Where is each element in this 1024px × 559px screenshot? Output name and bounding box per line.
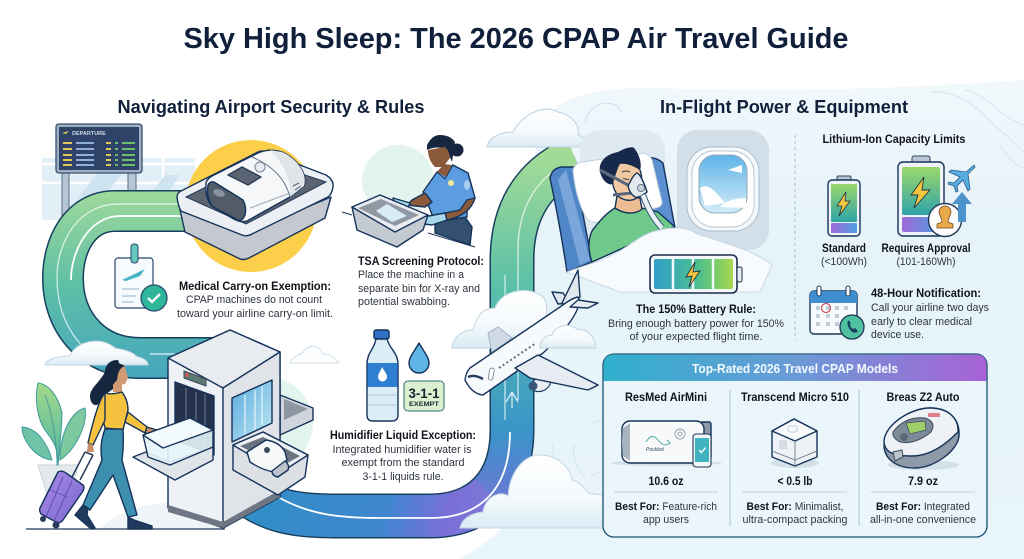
model: Transcend Micro 510 (741, 392, 849, 526)
model: Transcend Micro 510: ultra-compact packing (742, 514, 848, 526)
text: humidifier liquid exception: Integrated humidifier water is (332, 444, 472, 456)
cloud: behind airplane (452, 290, 547, 348)
icon: clear bin on scanner shelf (133, 418, 213, 480)
text: medical carry-on exemption: CPAP machines do not count (186, 294, 322, 306)
model: ResMed AirMini (610, 392, 722, 526)
icon: plant (22, 383, 85, 497)
text: 150% battery rule: Bring enough battery power for 150% (608, 318, 784, 330)
cloud: small centre (290, 346, 339, 363)
text: 48-hour notification (871, 288, 989, 341)
divider (794, 135, 796, 340)
illustration: TSA officer with bin (342, 135, 475, 247)
icon: airplane with up arrow (948, 165, 975, 222)
panel header (604, 355, 986, 381)
label: requires approval: Requires Approval (882, 243, 970, 255)
illustration: airplane (465, 270, 598, 395)
text: 48-hour notification: Call your airline two days (871, 302, 989, 314)
icon: departure board (56, 124, 142, 222)
text: TSA screening protocol: potential swabbing. (358, 296, 450, 308)
heading: airport security: Navigating Airport Security & Rules (118, 96, 424, 117)
illustration: sleeping passenger with window (550, 103, 772, 292)
text: humidifier liquid exception (330, 430, 476, 483)
icon: water drop (409, 343, 429, 373)
text: 150% battery rule: The 150% Battery Rule: (636, 304, 756, 316)
text: 150% battery rule (608, 304, 784, 343)
illustration: woman walking (75, 360, 160, 529)
badge: 3-1-1 exempt: 3-1-1 (408, 386, 440, 401)
text: medical carry-on exemption: Medical Carry-on Exemption: (179, 281, 331, 293)
model: ResMed AirMini: Pockled (646, 447, 664, 453)
label: standard battery: (<100Wh) (821, 256, 867, 268)
icon: water bottle (367, 330, 398, 421)
background: pale sky region (460, 80, 1024, 559)
panel title: Top-Rated 2026 Travel CPAP Models (692, 361, 898, 376)
model: Breas Z2 Auto: Breas Z2 Auto (886, 392, 960, 404)
model: Transcend Micro 510: Best For: Minimalist, (746, 501, 844, 513)
text: lithium-ion capacity limits: Lithium-Ion Capacity Limits (822, 134, 966, 146)
text: 150% battery rule: of your expected flight time. (630, 331, 762, 343)
model: Transcend Micro 510: Transcend Micro 510 (741, 392, 849, 404)
model: Breas Z2 Auto (870, 392, 976, 526)
cloud: in front of airplane (540, 325, 596, 348)
illustration: security X-ray scanner (168, 330, 313, 528)
label: standard battery (821, 243, 867, 268)
cloud: top of right section (487, 109, 590, 147)
model: ResMed AirMini: ResMed AirMini (625, 392, 707, 404)
text: 48-hour notification: device use. (871, 329, 924, 341)
cloud: left (45, 341, 148, 365)
model: ResMed AirMini: app users (643, 514, 689, 526)
badge: 3-1-1 exempt: EXEMPT (409, 401, 439, 408)
ribbon: green to blue conveyor path, left (57, 204, 215, 368)
icon: 150% battery (650, 255, 742, 293)
label: requires approval: (101-160Wh) (896, 256, 956, 268)
label: requires approval (882, 243, 970, 268)
icon: calendar with phone (810, 286, 864, 339)
model: Breas Z2 Auto: Best For: Integrated (876, 501, 970, 513)
heading: in-flight power: In-Flight Power & Equipment (660, 96, 908, 117)
text: medical carry-on exemption: toward your airline carry-on limit. (177, 308, 333, 320)
model: Breas Z2 Auto: all-in-one convenience (870, 514, 976, 526)
text: TSA screening protocol: TSA Screening Protocol: (358, 256, 484, 268)
text: humidifier liquid exception: Humidifier Liquid Exception: (330, 430, 476, 442)
badge: 3-1-1 exempt (404, 381, 444, 411)
illustration: pale circle behind scanner and floor (26, 377, 313, 529)
icon: large battery with approval stamp (898, 156, 962, 236)
icon: departure board: DEPARTURE (72, 131, 106, 137)
text: TSA screening protocol: Place the machine in a (358, 269, 465, 281)
label: standard battery: Standard (822, 243, 866, 255)
icon: bin with CPAP machine leaving scanner (233, 432, 308, 495)
text: humidifier liquid exception: exempt from the standard (342, 457, 464, 469)
text: 48-hour notification: 48-Hour Notification: (871, 288, 981, 300)
ribbon: blue to purple conveyor path, right (232, 158, 575, 518)
title: Sky High Sleep: The 2026 CPAP Air Travel Guide (184, 23, 848, 55)
model: ResMed AirMini: Best For: Feature-rich (615, 501, 717, 513)
text: 48-hour notification: early to clear medical (871, 316, 972, 328)
model: Transcend Micro 510: < 0.5 lb (778, 476, 812, 488)
icon: standard battery (828, 176, 860, 236)
text: humidifier liquid exception: 3-1-1 liquids rule. (362, 471, 444, 483)
text: TSA screening protocol (358, 256, 484, 308)
text: TSA screening protocol: separate bin for X-ray and (358, 283, 480, 295)
illustration: terminal window wall (42, 158, 195, 220)
icon: suitcase (40, 452, 93, 528)
text: medical carry-on exemption (177, 281, 333, 320)
decorative contour lines top right (548, 90, 1024, 478)
cloud: bottom centre (460, 455, 603, 528)
icon: clipboard boarding checklist (115, 244, 167, 311)
icon: CPAP machine in bin on yellow circle (177, 140, 333, 272)
model: ResMed AirMini: 10.6 oz (648, 476, 684, 488)
model: Breas Z2 Auto: 7.9 oz (908, 476, 938, 488)
panel: top-rated CPAP models (603, 354, 987, 537)
